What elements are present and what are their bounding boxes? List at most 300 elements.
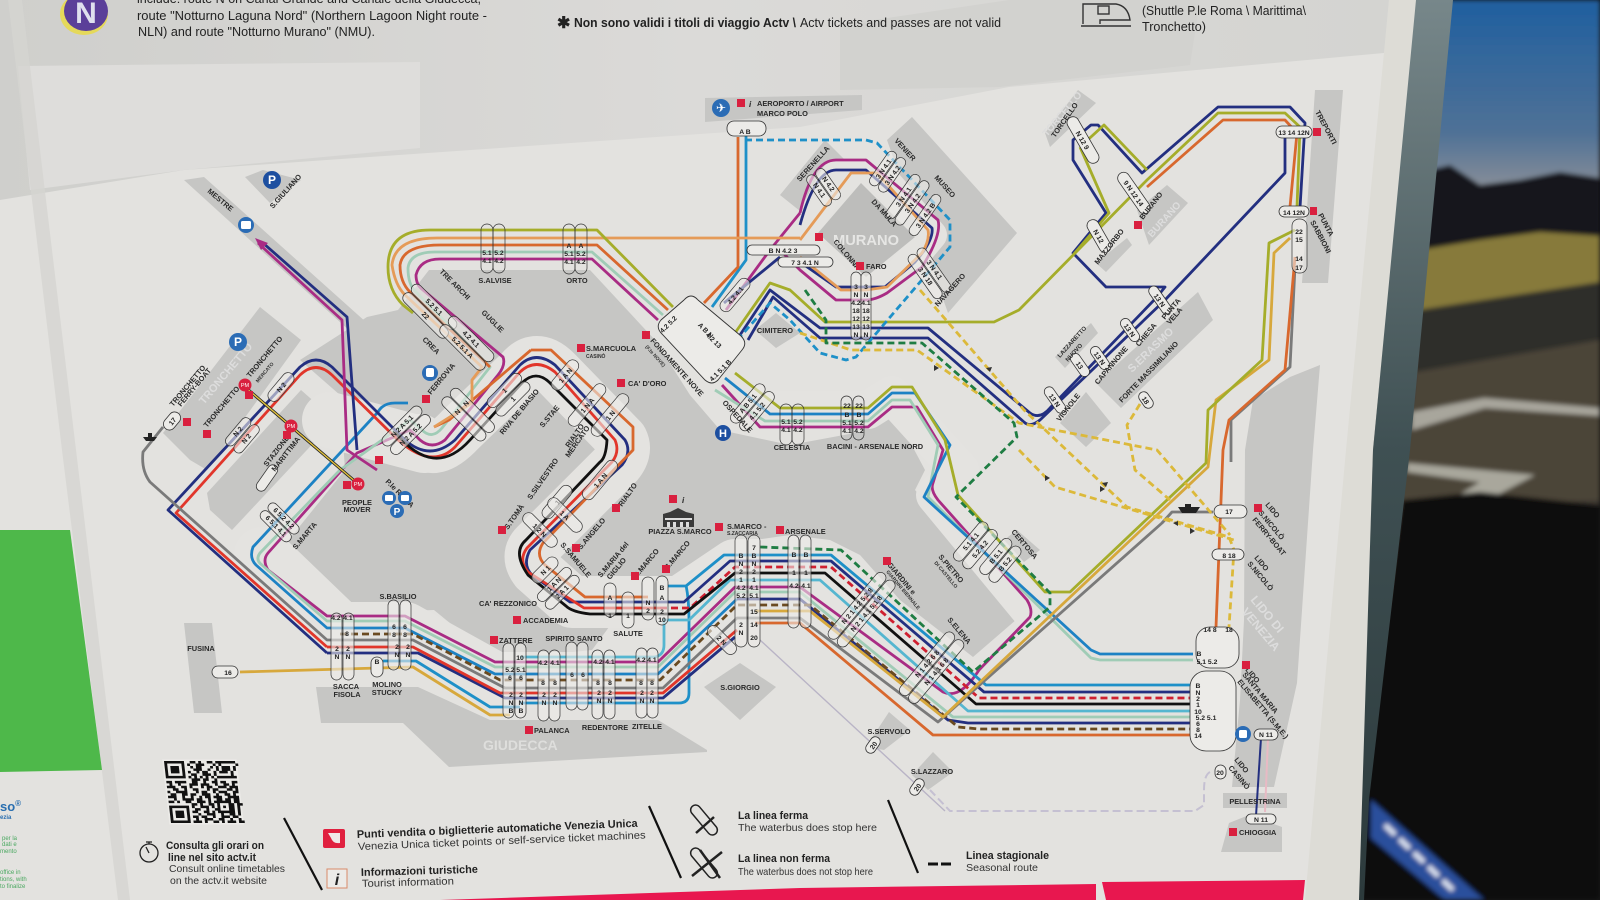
icon: parking Tronchetto: P	[234, 335, 242, 349]
stop: S.Marcuola: 1 A N	[558, 367, 574, 385]
stop: S.Tomà: 1 2 N	[531, 523, 547, 539]
stop labels: S.LAZZARO	[911, 767, 953, 776]
stop labels: TRONCHETTO	[168, 363, 208, 408]
icon: parking Piazzale Roma	[390, 504, 404, 518]
stop: Spirito Santo: SPIRITO SANTO	[545, 634, 603, 643]
hub: Fondamente Nove	[658, 296, 745, 383]
stop labels: GIARDINI BIENNALE	[884, 569, 921, 612]
stop: S.Basilio: 6	[403, 624, 407, 631]
stop: Punta Sabbioni pill	[1279, 206, 1317, 217]
stop: Giardini: N 2 1 4.1 5.1 8	[850, 595, 884, 634]
people mover stops: PM	[354, 482, 363, 488]
stop: S.Basilio: 8	[392, 632, 396, 639]
stop: Ca d'Oro: 1 N	[605, 410, 617, 422]
left sidebar text fragments: dati e	[2, 842, 17, 848]
stop: S.Maria del Giglio: 1	[608, 613, 612, 620]
left sidebar text fragments: to finalize	[0, 884, 26, 890]
stop labels: PUNTA	[1160, 296, 1183, 321]
stop labels: CAPANNONE	[1093, 344, 1130, 386]
stop: Sacca Fisola: 8	[345, 631, 349, 638]
stop: S.Marco Giardinetti	[656, 576, 668, 625]
legend: seasonal route	[966, 850, 1049, 874]
stop labels: S.NICOLÒ	[1256, 509, 1286, 542]
stop: S.Marco Vallaresso: 2	[646, 608, 650, 615]
stop: Airport pill	[727, 121, 766, 136]
stop: S.Marco Zaccaria: 1	[752, 577, 756, 584]
stop: Torcello	[1065, 114, 1101, 166]
hub: Fondamente Nove: 4.1 5.1 B	[709, 359, 733, 383]
stop: Redentore: 2	[608, 690, 612, 697]
direction arrows on seasonal lines	[934, 365, 1195, 534]
stop: Treporti pill: 13 14 12N	[1278, 130, 1310, 137]
stop: S.Maria del Giglio: A	[608, 595, 613, 602]
stop: S.Marco Zaccaria: B	[752, 553, 757, 560]
stop: Piazzale Roma pills	[380, 404, 433, 457]
stop: S.Marco Zaccaria: N	[752, 561, 757, 568]
stop: S.Marta: 6 5.2 4.2	[271, 507, 295, 531]
stop labels: FERRY-BOAT	[1250, 516, 1288, 558]
stop: Lido S.M.E. main pier: 2	[1196, 696, 1200, 703]
stop: Faro: 18	[862, 308, 870, 315]
stop: Accademia	[535, 565, 581, 611]
stop: Redentore	[582, 650, 628, 732]
icon: parking S.Giuliano	[263, 171, 281, 189]
legend: line stops	[738, 810, 877, 834]
stop: Sacca Fisola: 4.1	[343, 615, 353, 622]
stop: S.Alvise: S.ALVISE	[478, 276, 512, 285]
stop: S.Marco Zaccaria: 5.2	[736, 593, 746, 600]
stop labels: S.ZACCARIA	[727, 531, 758, 537]
stop: Cimitero: 4.2 4.1	[727, 286, 746, 306]
dashed blue Murano route	[740, 140, 950, 360]
legend: ticket points: Punti vendita o biglietterie automatiche Venezia Unica	[357, 818, 639, 841]
stop labels: RIVA DE BIASIO	[498, 387, 541, 436]
stop: Punta Sabbioni vertical: 22	[1295, 229, 1303, 236]
stop: Navagero: 3 N 4.1	[925, 259, 943, 282]
route network	[143, 107, 1305, 816]
stop: Molino Stucky: B	[375, 659, 380, 666]
stop: S.Marco Giardinetti: 10	[658, 617, 666, 624]
stop: Bacini	[827, 396, 924, 451]
stop: Chioggia N 11: N 11	[1254, 817, 1268, 824]
legend: seasonal route: Seasonal route	[966, 862, 1038, 874]
stop labels: OSPEDALE	[721, 398, 754, 435]
island names in white: LIDO DI	[1248, 593, 1287, 636]
stop: S.Marco Zaccaria: 5.1	[749, 593, 759, 600]
stop: Faro: N	[854, 292, 859, 299]
legend: timetables: Consult online timetables	[169, 863, 285, 875]
route 2 red seasonal dashes	[660, 567, 1193, 698]
stop: S.Marco Zaccaria: 2	[739, 569, 743, 576]
stop: Tronchetto People Mover	[223, 416, 261, 455]
stop: S.Basilio: 2	[395, 644, 399, 651]
line 20 seasonal lilac	[930, 772, 1210, 811]
left sidebar text fragments: tions, with	[0, 877, 27, 883]
stop: Burano	[1115, 170, 1153, 216]
stop: Palanca	[525, 650, 570, 735]
stop labels: S.MARCUOLA	[586, 344, 637, 353]
stop: S.Marco Vallaresso	[642, 577, 654, 620]
stop: Forte Massimiliano	[1137, 390, 1155, 410]
stop: S.Marco Zaccaria: B	[739, 553, 744, 560]
stop: Zattere: 2	[519, 692, 523, 699]
green seasonal dashes	[760, 290, 1050, 672]
stop: S.Basilio: 8	[403, 632, 407, 639]
stop labels: TRE ARCHI	[438, 267, 472, 302]
service icons	[143, 99, 1251, 742]
stop: Sacca Fisola: FISOLA	[333, 690, 361, 699]
stop: Tre Archi and Crea: 5.2 5.1	[424, 298, 443, 318]
stop: Da Mula	[884, 172, 931, 227]
stop: Lido S.M.E. main pier: 5.2 5.1	[1196, 715, 1217, 722]
stop: Salute: SALUTE	[613, 629, 643, 638]
stop labels: DA MULA	[870, 197, 899, 229]
route 1 black	[395, 376, 1193, 704]
route B blue	[383, 133, 1193, 707]
stop: S.Elena: N 1 4.2 6 8	[914, 649, 941, 679]
stop: Punta Sabbioni vertical: 17	[1295, 265, 1303, 272]
stop: Vignole: 13 N	[1047, 393, 1061, 409]
stop: Chioggia N 11	[1246, 814, 1276, 824]
sign white frame	[1300, 0, 1416, 900]
icon: parking Tronchetto	[229, 333, 247, 351]
stop labels: S.PIETRO	[936, 553, 966, 585]
stop: Lido N 11: N 11	[1259, 732, 1273, 739]
stop labels: LAZZARETTO	[1057, 325, 1088, 359]
stop: Sacca Fisola: 4.2	[331, 615, 341, 622]
stop: Faro	[851, 272, 871, 340]
stop: Lido north pier: B	[1197, 651, 1202, 658]
red footer band	[440, 880, 1305, 900]
stop: Mazzorbo	[1085, 217, 1113, 255]
stop: S.Marcuola	[549, 357, 581, 393]
stop labels: CA' REZZONICO	[479, 599, 537, 608]
stop: Giardini	[826, 570, 897, 649]
stop: Lido Casino 20	[1215, 765, 1226, 779]
stop: Zitelle: N	[640, 698, 645, 705]
stop: S.Elena	[897, 630, 966, 706]
legend divider 2	[649, 806, 681, 878]
stop labels: PEOPLE	[342, 498, 372, 507]
stop: Piazzale Roma pills: N 2 A 5.2	[399, 423, 424, 448]
stop labels: TRONCHETTO	[202, 384, 242, 429]
icon: Piazza S.Marco basilica	[663, 495, 694, 527]
stop labels: RIALTO	[616, 481, 639, 508]
stop: S.Silvestro: 1	[554, 499, 562, 507]
stop: Celestia	[774, 404, 811, 452]
stop labels: MARITTIMA	[269, 434, 303, 473]
stop: Tronchetto Mercato: N 2	[276, 381, 288, 394]
legend divider 3	[888, 800, 918, 873]
stop: Lido Casino 20: 20	[1216, 770, 1224, 777]
stop: Venier: 3 N 4.2	[884, 165, 903, 187]
left sidebar text fragments: ezia	[0, 815, 12, 821]
stop: S.Marta	[258, 501, 301, 544]
stop labels: LIDO	[1252, 554, 1271, 573]
stop labels: FUSINA	[187, 644, 215, 653]
stop: Zattere: B	[519, 708, 524, 715]
stop labels: S.SILVESTRO	[525, 456, 560, 501]
stop: Punta Sabbioni pill: 14 12N	[1283, 210, 1305, 217]
stop: Punta Sabbioni vertical	[1292, 219, 1307, 273]
stop: Zitelle: 2	[640, 690, 644, 697]
stop: Guglie	[437, 314, 496, 373]
stop: Fusina 16: 16	[224, 670, 232, 677]
stop: S.Marco Giardinetti: 2	[660, 609, 664, 616]
stop: Faro: 13	[862, 324, 870, 331]
icon: line stops here	[689, 803, 719, 837]
people mover stops: PM	[241, 383, 250, 389]
island names in white: VENEZIA	[1239, 605, 1283, 654]
stop: Palanca: 8	[541, 680, 545, 687]
stop: Chiesa	[1088, 344, 1112, 372]
stop labels: DI CASTELLO	[932, 560, 959, 590]
stop labels: TREPORTI	[1313, 109, 1339, 146]
people mover stops	[238, 378, 364, 490]
stop: S.Marco Zaccaria: 2	[739, 622, 743, 629]
stop: Zattere	[490, 636, 533, 718]
stop: Tronchetto People Mover: N 2	[241, 433, 253, 445]
stop labels: S.ELENA	[945, 616, 973, 646]
stop: Celestia: 4.2	[793, 427, 803, 434]
stop: S.Alvise	[478, 224, 512, 285]
stop: Sacca Fisola: N	[346, 654, 351, 661]
icon: seasonal dash	[928, 862, 951, 866]
stop: Redentore: N	[608, 698, 613, 705]
stop: Navagero: 3 N 18	[916, 267, 933, 287]
airport label	[737, 99, 844, 118]
stop labels: CERTOSA	[1009, 528, 1040, 561]
stop labels: FORTE MASSIMILIANO	[1117, 339, 1180, 404]
stop labels: S.GIORGIO	[720, 683, 760, 692]
stop: Lido S.M.E. main pier: 1	[1196, 702, 1200, 709]
stop labels: TRONCHETTO	[245, 334, 285, 379]
hub: Fondamente Nove: 4.2 13	[704, 332, 722, 350]
stop: S.Lazzaro: 20	[913, 783, 923, 793]
stop: S.Stae	[566, 381, 608, 429]
icon: Piazza S.Marco basilica: i	[682, 496, 685, 505]
airport label: i	[749, 100, 752, 109]
stop: S.Pietro di Castello	[951, 520, 1000, 571]
stop: Tronchetto Ferry 17	[161, 409, 183, 433]
stop labels: GIGLIO	[605, 555, 628, 581]
stop: Burano: 9 N 12 14	[1121, 180, 1144, 208]
stop labels: FERROVIA	[426, 361, 458, 396]
stop: S.Pietro di Castello: 5.2 4.2	[971, 539, 990, 560]
stop: Ferrovia	[439, 386, 497, 443]
people mover track	[245, 387, 357, 483]
stop: Zitelle: 2	[650, 690, 654, 697]
stop labels	[168, 101, 1339, 837]
stop: Tre Archi and Crea: 22	[420, 311, 430, 321]
stop: Faro: 18	[852, 308, 860, 315]
stop: Ospedale: 4.1 5.2	[748, 401, 767, 422]
stops: vertical capsules	[212, 121, 1321, 824]
stop: Salute	[613, 592, 643, 638]
stop labels: S.TOMÀ	[502, 502, 526, 531]
stop: Orto: 4.2	[576, 259, 586, 266]
left sidebar text fragments	[0, 799, 27, 890]
stop: Serenella	[805, 167, 843, 208]
stop: S.Basilio	[380, 592, 417, 670]
stop labels: MOVER	[343, 505, 371, 514]
island names in white: TORCELLO	[1041, 90, 1085, 139]
stop: Zattere: 10	[516, 655, 524, 662]
stop: Faro: 12	[852, 316, 860, 323]
stop labels: MESTRE	[206, 187, 235, 213]
stop: S.Silvestro	[540, 483, 574, 521]
stop labels: MERCATO	[255, 361, 276, 384]
stop: Zitelle: 4.2	[636, 657, 646, 664]
stop: Zattere: 6	[508, 675, 512, 682]
stop: Orto: 5.1	[564, 251, 574, 258]
icon: line does not stop here	[689, 846, 722, 880]
route peach	[392, 173, 928, 427]
stop: Arsenale: ARSENALE	[785, 527, 826, 536]
stop: Zattere: N	[509, 700, 514, 707]
route N navy	[168, 107, 1305, 723]
stop labels: COLONNA	[831, 238, 863, 272]
stop: Molino Stucky: MOLINO	[372, 680, 402, 689]
stop: Capannone: 13 N	[1122, 323, 1136, 339]
stop: Punta Vela: 13 N	[1152, 293, 1166, 309]
stop: Da Mula: 3 N 4.2	[904, 193, 923, 215]
stop labels: SABBIONI	[1308, 219, 1333, 255]
stop: Ferrovia: N	[462, 400, 471, 408]
stop labels: CREA	[421, 335, 442, 357]
stop: Rialto Mercato	[580, 458, 620, 502]
stop: Sacca Fisola: 2	[346, 646, 350, 653]
stop: S.Basilio: S.BASILIO	[380, 592, 417, 601]
stop: Airport pill: A B	[739, 129, 751, 136]
stop: S.Alvise: 4.2	[494, 258, 504, 265]
stop: Lido S.M.E. main pier: 10	[1194, 709, 1202, 716]
stop: Arsenale: 1	[804, 570, 808, 577]
stop: Arsenale: 4.1	[801, 583, 811, 590]
stop: Celestia: 5.2	[793, 419, 803, 426]
stop: Sacca Fisola: 2	[335, 646, 339, 653]
stop: S.Basilio: N	[406, 652, 411, 659]
stop: Zattere: ZATTERE	[499, 636, 533, 645]
stop: S.Servolo	[864, 735, 882, 755]
stop: S.Marco Zaccaria: 20	[750, 635, 758, 642]
stop: Ca Rezzonico	[529, 554, 561, 586]
stop: Redentore: 8	[596, 680, 600, 687]
icon: parking S.Giuliano: P	[268, 173, 276, 187]
stop: Arsenale	[776, 526, 826, 628]
stop: Sacca Fisola: N	[335, 654, 340, 661]
stop: Arsenale: B	[792, 552, 797, 559]
stop: S.Pietro di Castello: 5.1 4.1	[962, 532, 981, 552]
stop: Punta Vela	[1147, 284, 1173, 316]
night routes note: route "Notturno Laguna Nord" (Northern Lagoon Night route -	[137, 8, 487, 23]
stop: S.Servolo: 20	[869, 741, 879, 751]
route 16 and 15 gold	[240, 238, 1290, 717]
stop: Faro: 4.1	[861, 300, 871, 307]
stop: Forte Massimiliano: 18	[1140, 396, 1150, 406]
stop: Orto: ORTO	[566, 276, 588, 285]
stop: Zattere: 5.1	[516, 667, 526, 674]
stop: S.Basilio: 2	[406, 644, 410, 651]
stop: Rialto Mercato: 1 A N	[593, 472, 609, 490]
stop: S.Giorgio 2N	[705, 623, 739, 657]
stop: Bacini: B	[857, 412, 862, 419]
tickets not valid note	[557, 15, 1001, 32]
legend: tourist information: Informazioni turistiche	[361, 864, 478, 879]
stop: Faro: N	[864, 292, 869, 299]
stop: Venier	[868, 149, 908, 194]
stop: Serenella: N 4.1	[811, 182, 826, 200]
stop labels: GIARDINI e	[885, 561, 918, 596]
stop: S.Marco Zaccaria: 15	[750, 609, 758, 616]
stop: S.Marco Vallaresso: N	[646, 600, 651, 607]
stop labels: PELLESTRINA	[1229, 797, 1281, 806]
stop: Museo	[907, 192, 943, 238]
stop: S.Marco Zaccaria: 1	[739, 577, 743, 584]
stop: Arsenale: 1	[792, 570, 796, 577]
stop: Faro: 4.2	[851, 300, 861, 307]
stop: Palanca: PALANCA	[534, 726, 570, 735]
stop: Redentore: 2	[597, 690, 601, 697]
stop labels: CASINÒ	[586, 352, 606, 360]
stop: Da Mula: 3 N 4.1	[895, 186, 914, 208]
stop: Cimitero	[718, 276, 752, 314]
stop: Zattere: 2	[509, 692, 513, 699]
stop labels: S.MARIA del	[596, 540, 631, 579]
stop labels: S.SERVOLO	[868, 727, 911, 736]
stop labels: S.SAMUELE	[558, 541, 593, 579]
stop labels: CHIOGGIA	[1239, 828, 1277, 837]
stop labels: VIGNOLE	[1054, 391, 1082, 423]
icon: tourist information: i	[335, 872, 340, 889]
route 8 brown seasonal	[340, 605, 1193, 729]
stop: Zitelle: 4.1	[647, 657, 657, 664]
shuttle note: (Shuttle P.le Roma \ Marittima\	[1142, 3, 1306, 18]
stop: Bacini: 22	[843, 403, 851, 410]
stop: Orto: A	[579, 243, 584, 250]
stop: Palanca: 8	[553, 680, 557, 687]
stop: Bacini: BACINI - ARSENALE NORD	[827, 442, 924, 451]
stop: Zitelle	[632, 648, 662, 731]
stop: Punta Sabbioni vertical: 14	[1295, 256, 1303, 263]
stop: Orto: 5.2	[576, 251, 586, 258]
legend: timetables: on the actv.it website	[170, 875, 267, 887]
legend: ticket points: Venezia Unica ticket points or self-service ticket machines	[358, 829, 646, 853]
icon: hospital	[715, 425, 731, 441]
stop: Redentore: REDENTORE	[582, 723, 628, 732]
stop: Vignole	[1042, 385, 1068, 415]
stop labels: S.MARCO -	[727, 522, 767, 531]
stop: Celestia: 5.1	[781, 419, 791, 426]
stop: Lido S.M.E. main pier: 6	[1196, 721, 1200, 728]
stop: Piazzale Roma pills: N 2 A 5.1	[390, 414, 415, 439]
legend: line does not stop: La linea non ferma	[738, 853, 831, 865]
stop: Ferry-boat 17: 17	[1225, 509, 1233, 516]
stop: S.Marco Giardinetti: B	[660, 585, 665, 592]
stop: Faro: 3	[854, 284, 858, 291]
stop: Colonna	[747, 245, 833, 267]
stop labels: MERCATO	[563, 424, 592, 459]
stop: Lido S.M.E. main pier: 14	[1194, 733, 1202, 740]
stop: Ferry-boat 17	[1214, 505, 1247, 518]
stop: Stazione Marittima capsule	[254, 463, 280, 493]
stop: Guglie: 5.2 5.1 A	[450, 336, 474, 360]
airport label: AEROPORTO / AIRPORT	[757, 99, 844, 108]
stop labels: MUSEO	[933, 173, 958, 200]
stop: Riva de Biasio: 1	[510, 396, 518, 403]
tickets not valid note: Non sono validi i titoli di viaggio Actv \	[574, 15, 796, 30]
stop: Orto	[563, 224, 588, 285]
